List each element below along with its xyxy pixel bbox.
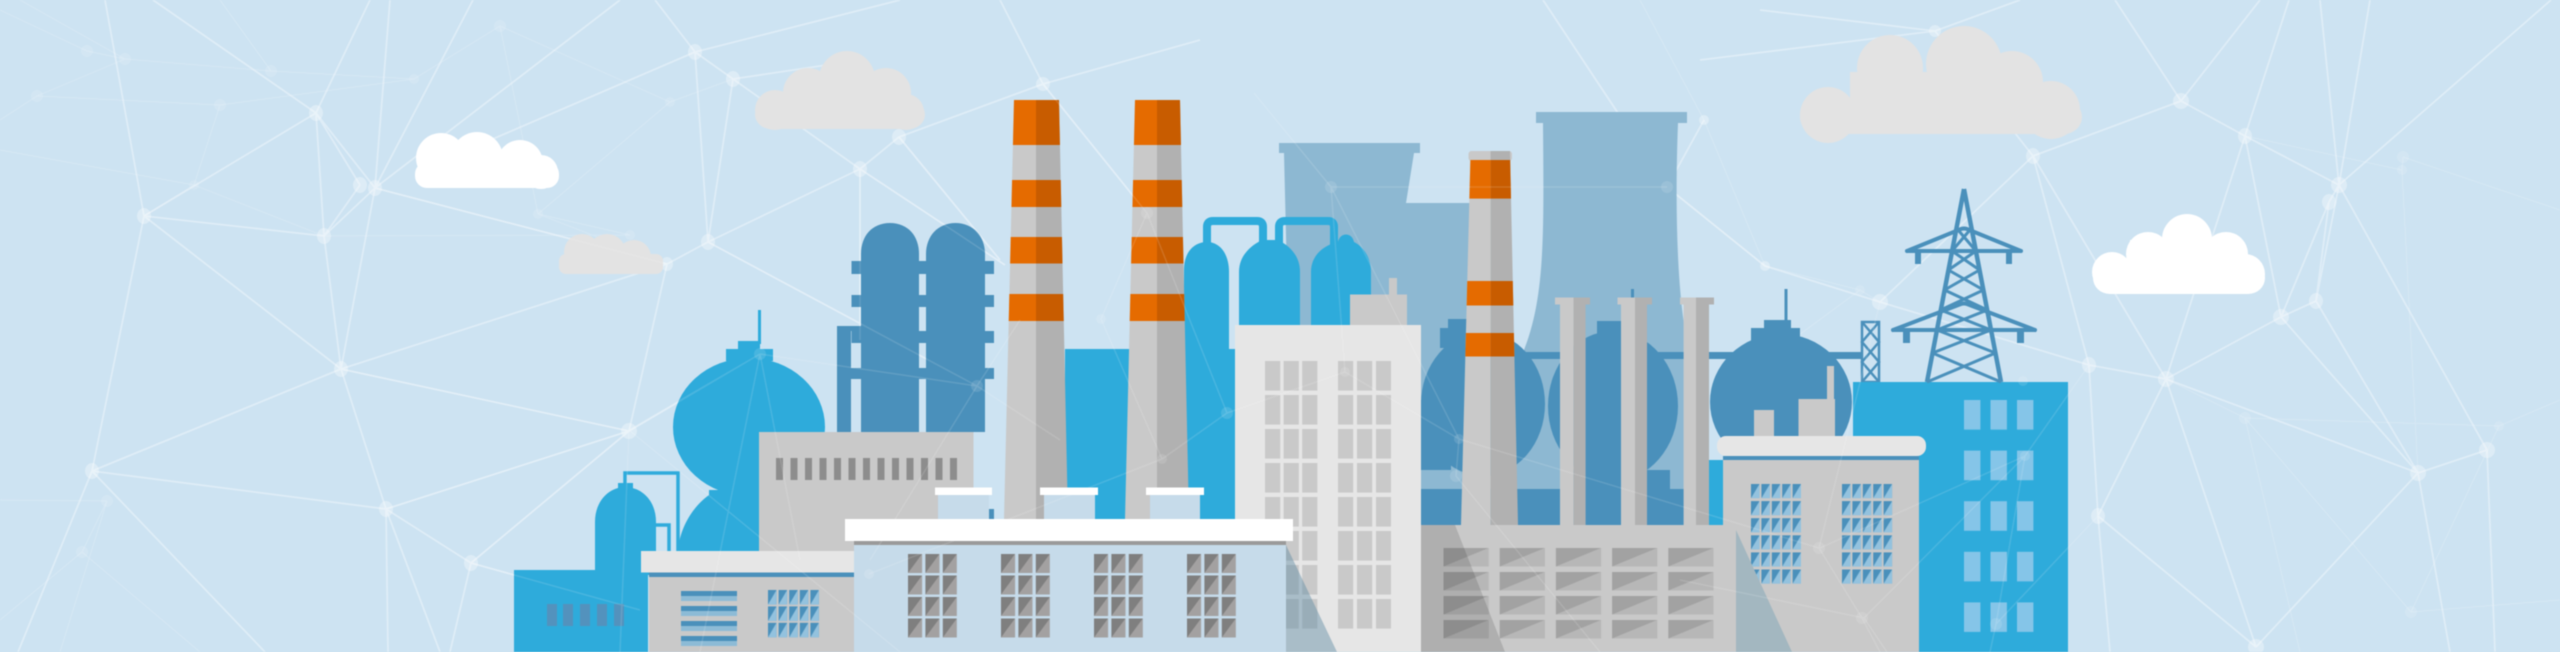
louvres — [681, 591, 737, 646]
tower windows left — [1265, 361, 1318, 629]
vent row — [776, 458, 957, 480]
roof boxes on main hall — [935, 488, 1204, 521]
spherical storage tank: large blue — [673, 310, 825, 551]
cast shadow — [1421, 525, 1505, 652]
pressure tank with pipes: lower left — [595, 473, 678, 575]
windows right — [1842, 484, 1893, 584]
blue building: right — [1853, 382, 2068, 652]
cloud: small white left — [415, 132, 559, 189]
building: lower grey block with window grid — [1421, 525, 1736, 652]
roof chimneys on right building — [1754, 366, 1835, 438]
tower windows right — [1338, 361, 1391, 629]
building: right grey — [1717, 436, 1926, 652]
thin stacks — [1555, 298, 1714, 526]
tanks: dark spherical row with pipe — [1421, 289, 1862, 525]
grey block building with vents — [759, 432, 974, 552]
chimney: third, behind right plant — [1460, 150, 1518, 526]
shadow on tower — [1286, 545, 1337, 652]
lattice mast — [1862, 322, 1879, 382]
building: main hall — [845, 519, 1293, 652]
windows left — [1751, 484, 1801, 584]
gas cylinders with connecting pipes — [1184, 221, 1371, 349]
blue block behind chimneys — [1065, 349, 1235, 521]
cloud: white right — [2092, 214, 2265, 294]
network overlay: faint lines and nodes across buildings — [341, 84, 2098, 652]
chimney: tall left — [1004, 99, 1068, 520]
main hall windows — [908, 554, 957, 638]
vents — [547, 604, 624, 626]
blue building: low left — [514, 570, 648, 652]
bright blue sliver beside right plant — [1709, 460, 1724, 526]
window grid — [1444, 548, 1714, 640]
cooling tower: right — [1421, 112, 1706, 489]
chimney: tall right — [1121, 100, 1193, 520]
cooling tower: left — [1279, 143, 1475, 400]
cloud: small grey left — [559, 234, 663, 274]
cloud: grey top centre — [755, 51, 925, 130]
building: tall white tower — [1235, 278, 1421, 652]
window grid — [1964, 400, 2034, 632]
building: low grey with louvres — [641, 551, 854, 652]
icon: electricity pylon — [1893, 189, 2035, 382]
cloud: large grey right — [1800, 26, 2082, 143]
shadow cast on right grey building — [1736, 530, 1792, 652]
blue window grid — [768, 590, 820, 638]
tank column pair: twin distillation towers — [837, 223, 994, 519]
